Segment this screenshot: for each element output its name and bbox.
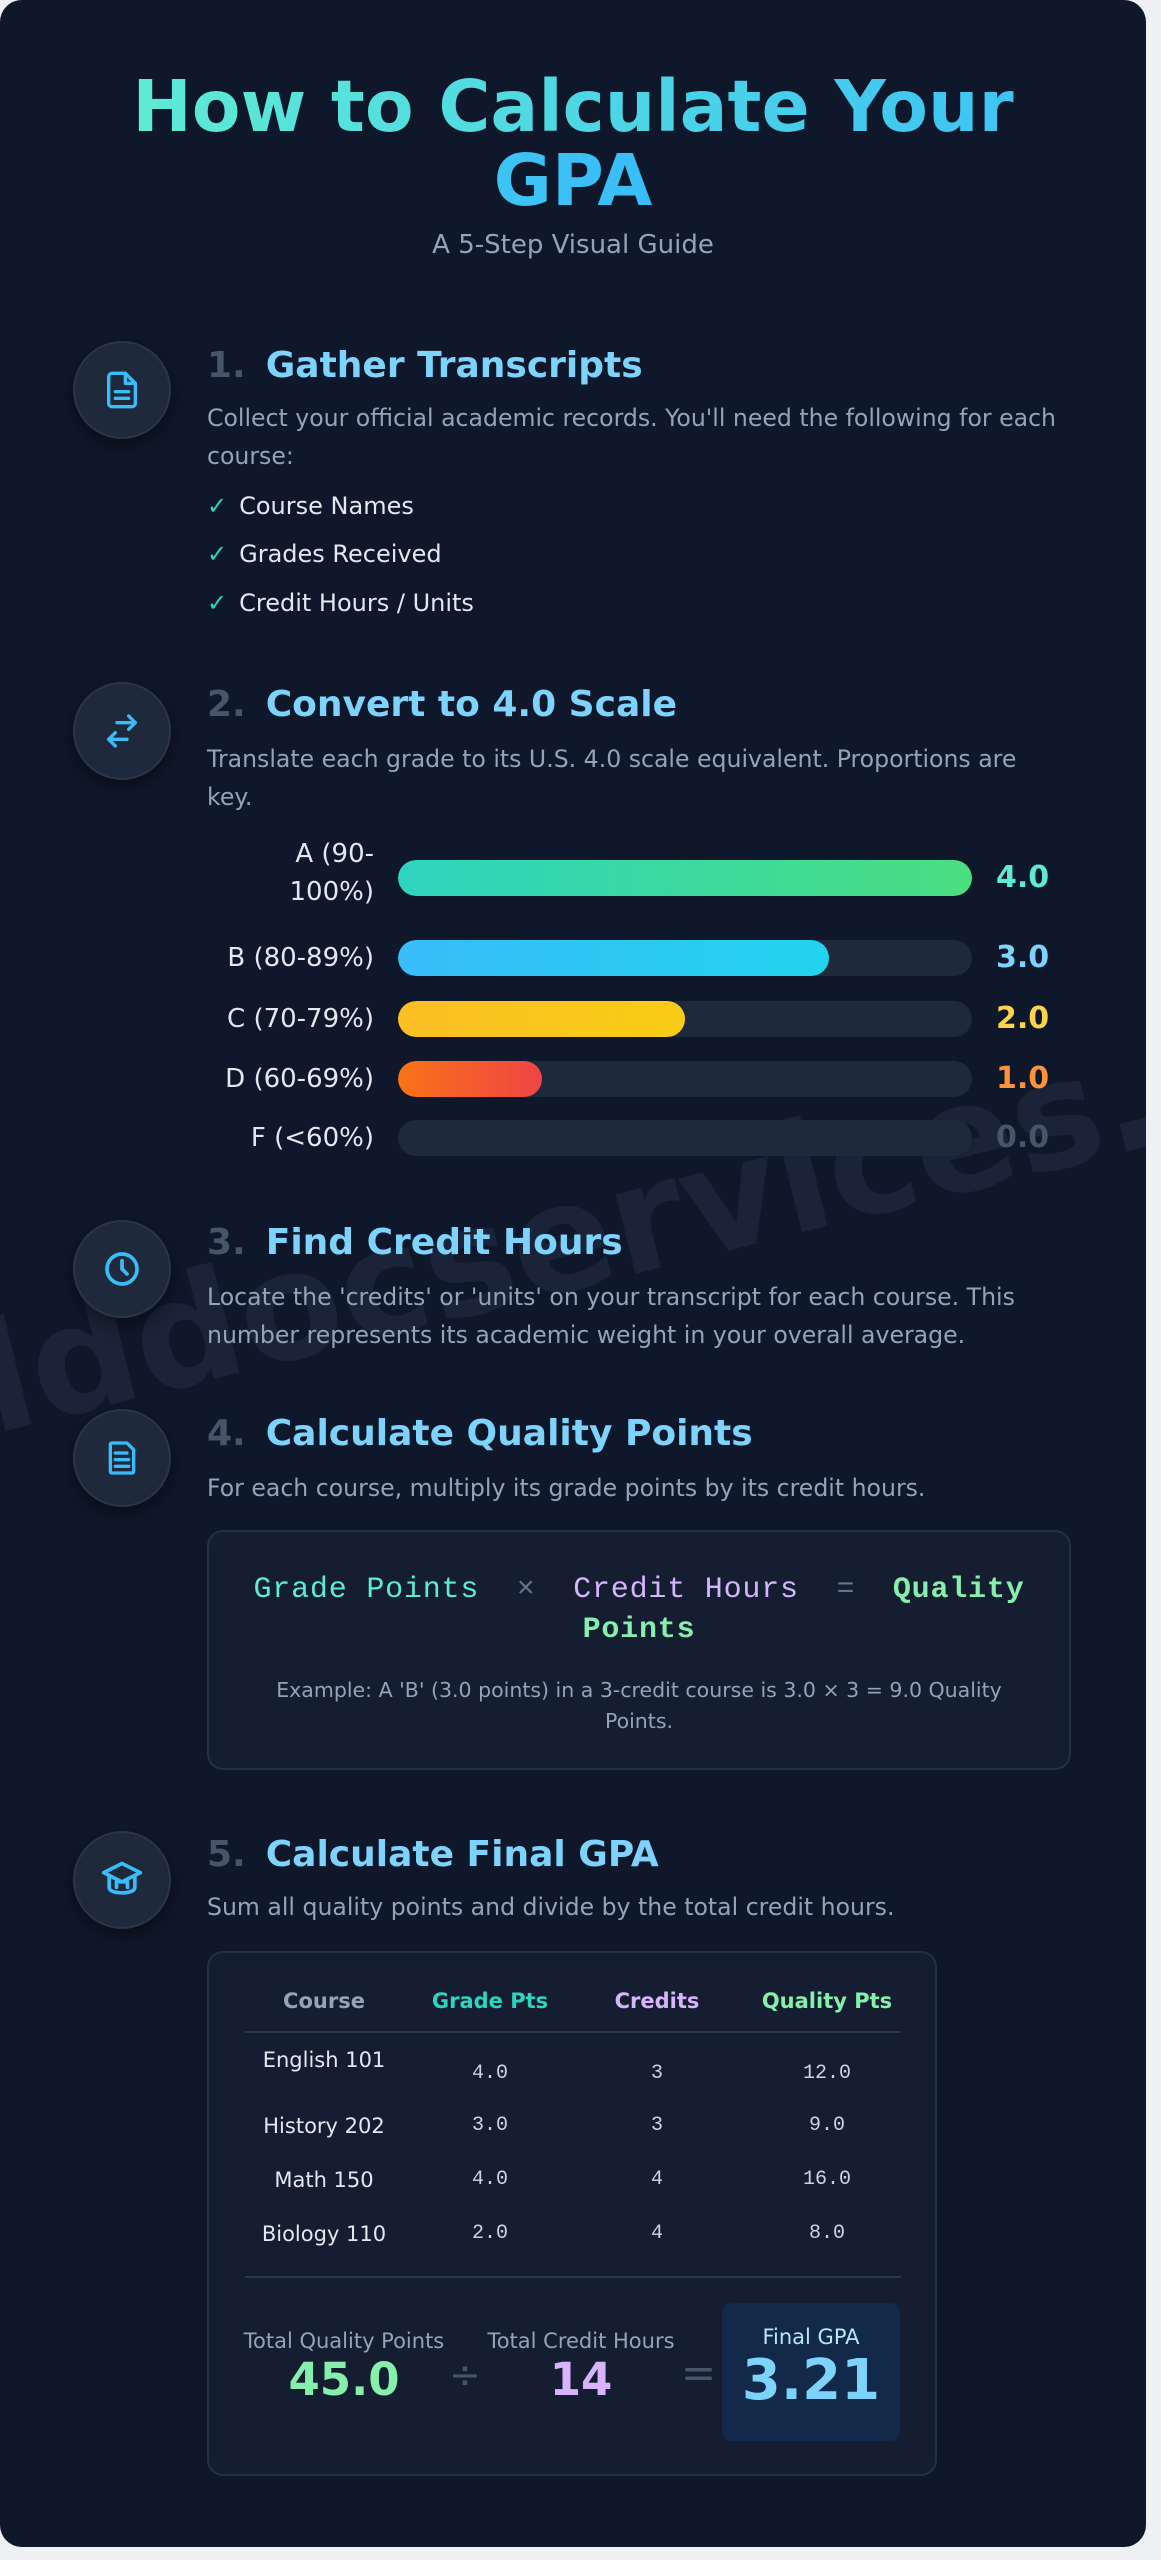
table rows (262, 2048, 851, 2246)
total quality points: Total Quality Points (244, 2329, 444, 2353)
step 3 heading: 3. Find Credit Hours (207, 1222, 623, 1263)
table rows: 9.0 (809, 2114, 845, 2137)
table rows: 3.0 (472, 2114, 508, 2137)
final GPA box: Final GPA (762, 2325, 860, 2349)
checklist: ✓ Course Names (207, 492, 414, 520)
example: Example: A 'B' (3.0 points) in a 3-credit course is 3.0 × 3 = 9.0 Quality Points. (276, 1678, 1002, 1733)
table rows: 4 (651, 2168, 663, 2191)
step 2 description: Translate each grade to its U.S. 4.0 scale equivalent. Proportions are key. (207, 745, 1016, 811)
table rows: Math 150 (274, 2168, 374, 2192)
bar chart: grade scale (225, 839, 1049, 1156)
title: How to Calculate Your (132, 65, 1014, 148)
checklist: ✓ Grades Received (207, 540, 442, 568)
bar chart: grade scale: 2.0 (996, 1001, 1049, 1036)
table rows: 2.0 (472, 2222, 508, 2245)
table header: Credits (615, 1989, 699, 2013)
checklist: ✓ Credit Hours / Units (207, 589, 474, 617)
bar chart: grade scale: C (70-79%) (227, 1004, 374, 1034)
final GPA box (722, 2303, 900, 2441)
table rows: English 101 (263, 2048, 385, 2072)
subtitle: A 5-Step Visual Guide (432, 230, 714, 260)
step 5 heading: 5. Calculate Final GPA (207, 1834, 659, 1875)
table header: Quality Pts (762, 1989, 892, 2013)
table rows: 4.0 (472, 2062, 508, 2085)
step 1 heading: 1. Gather Transcripts (207, 345, 643, 386)
final GPA box: 3.21 (742, 2348, 880, 2413)
step 4 description: For each course, multiply its grade points by its credit hours. (207, 1474, 925, 1502)
total credit hours: 14 (550, 2353, 612, 2406)
equals sign: = (681, 2348, 716, 2397)
step 2 heading: 2. Convert to 4.0 Scale (207, 684, 677, 725)
total credit hours (487, 2329, 675, 2406)
formula box (207, 1530, 1071, 1770)
step 2 icon: arrows (73, 682, 171, 780)
step 3 description: Locate the 'credits' or 'units' on your transcript for each course. This number represents its academic weight in your overall average. (207, 1283, 1015, 1349)
divide sign: ÷ (449, 2353, 481, 2397)
step 5 icon: graduation (73, 1831, 171, 1929)
table card (207, 1951, 937, 2476)
bar chart: grade scale: 1.0 (996, 1061, 1049, 1096)
table rows: 4 (651, 2222, 663, 2245)
table rows: 8.0 (809, 2222, 845, 2245)
bar chart: grade scale: D (60-69%) (225, 1064, 374, 1094)
step 5 description: Sum all quality points and divide by the total credit hours. (207, 1893, 894, 1921)
table rows: 16.0 (803, 2168, 851, 2191)
table rows: History 202 (263, 2114, 385, 2138)
table rows: 3 (651, 2114, 663, 2137)
bar chart: grade scale: 0.0 (996, 1120, 1049, 1155)
step 4 icon: document (73, 1409, 171, 1507)
table rows: 4.0 (472, 2168, 508, 2191)
total credit hours: Total Credit Hours (487, 2329, 675, 2353)
bar chart: grade scale: B (80-89%) (227, 943, 374, 973)
title: GPA (494, 139, 652, 222)
bar chart: grade scale: 100%) (290, 877, 374, 907)
title (132, 65, 1014, 222)
table header: Grade Pts (432, 1989, 548, 2013)
checklist (207, 492, 474, 617)
step 1 description: Collect your official academic records. You'll need the following for each course: (207, 404, 1056, 470)
bar chart: grade scale: 3.0 (996, 940, 1049, 975)
bar chart: grade scale: A (90- (295, 839, 374, 869)
table rows: 3 (651, 2062, 663, 2085)
table rows: Biology 110 (262, 2222, 386, 2246)
step 3 icon: clock (73, 1220, 171, 1318)
table header: Course (283, 1989, 365, 2013)
step 4 heading: 4. Calculate Quality Points (207, 1413, 753, 1454)
bar chart: grade scale: F (<60%) (251, 1123, 374, 1153)
step 1 icon: document (73, 341, 171, 439)
total quality points: 45.0 (288, 2353, 400, 2406)
total quality points (244, 2329, 444, 2406)
bar chart: grade scale: 4.0 (996, 860, 1049, 895)
formula: Grade Points × Credit Hours = Quality Points (254, 1573, 1024, 1647)
table header (283, 1989, 892, 2013)
table rows: 12.0 (803, 2062, 851, 2085)
